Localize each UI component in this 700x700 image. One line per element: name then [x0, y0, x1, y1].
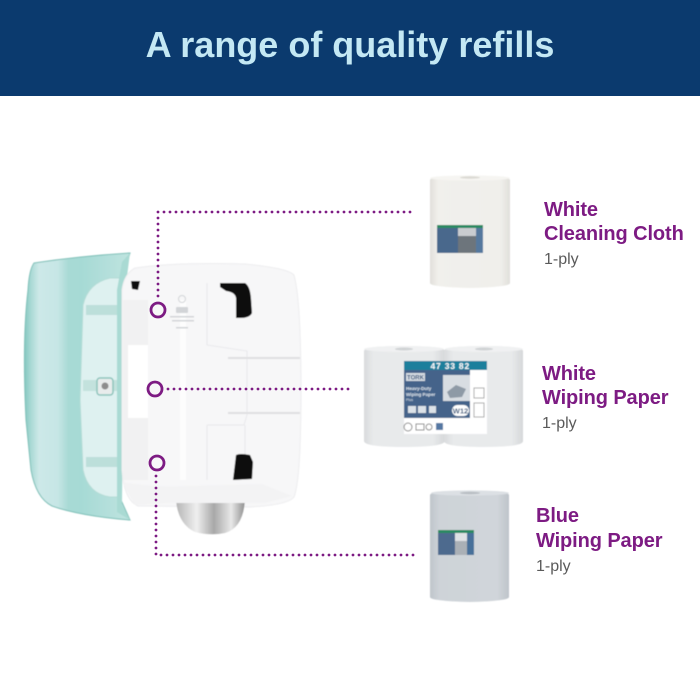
callout: top connector [151, 212, 411, 317]
label: blue wiping paper: Wiping Paper [536, 530, 663, 552]
callout: bottom connector [150, 456, 414, 555]
product: white wiping paper twin rolls [364, 346, 523, 447]
product: white cleaning cloth roll [430, 175, 510, 288]
product label [437, 225, 483, 253]
title: A range of quality refills [146, 24, 554, 65]
label: white cleaning cloth [544, 199, 684, 268]
badge W12: W12 [453, 406, 468, 416]
dispenser [24, 253, 301, 534]
product label: TORK [407, 376, 425, 382]
label: white wiping paper: Wiping Paper [542, 387, 669, 409]
dispenser cover (open teal lid) [24, 253, 130, 520]
label: white cleaning cloth: 1-ply [544, 251, 579, 268]
logo mark [170, 296, 194, 328]
product label: Plus [406, 398, 413, 402]
chrome dispensing nozzle [122, 482, 292, 534]
label: blue wiping paper: 1-ply [536, 558, 571, 575]
label: blue wiping paper [536, 505, 663, 575]
product label [404, 361, 487, 434]
icon: lock [97, 378, 113, 395]
callout: middle connector [148, 382, 353, 396]
product label: Heavy-Duty [406, 386, 432, 391]
dispenser back plate [122, 264, 301, 507]
label: white cleaning cloth: Cleaning Cloth [544, 223, 684, 245]
black slot: top left [131, 281, 140, 290]
label: white wiping paper: White [542, 363, 596, 385]
product code: 47 33 82 [430, 361, 470, 371]
label: white wiping paper: 1-ply [542, 415, 577, 432]
header banner [0, 0, 700, 96]
label: blue wiping paper: Blue [536, 505, 579, 527]
black slot: bottom right [233, 454, 253, 480]
label: white wiping paper [542, 363, 669, 432]
black slot: top right [220, 283, 252, 318]
label: white cleaning cloth: White [544, 199, 598, 221]
product: blue wiping paper roll [430, 490, 509, 602]
product label [438, 530, 474, 555]
product label: Wiping Paper [406, 392, 436, 397]
